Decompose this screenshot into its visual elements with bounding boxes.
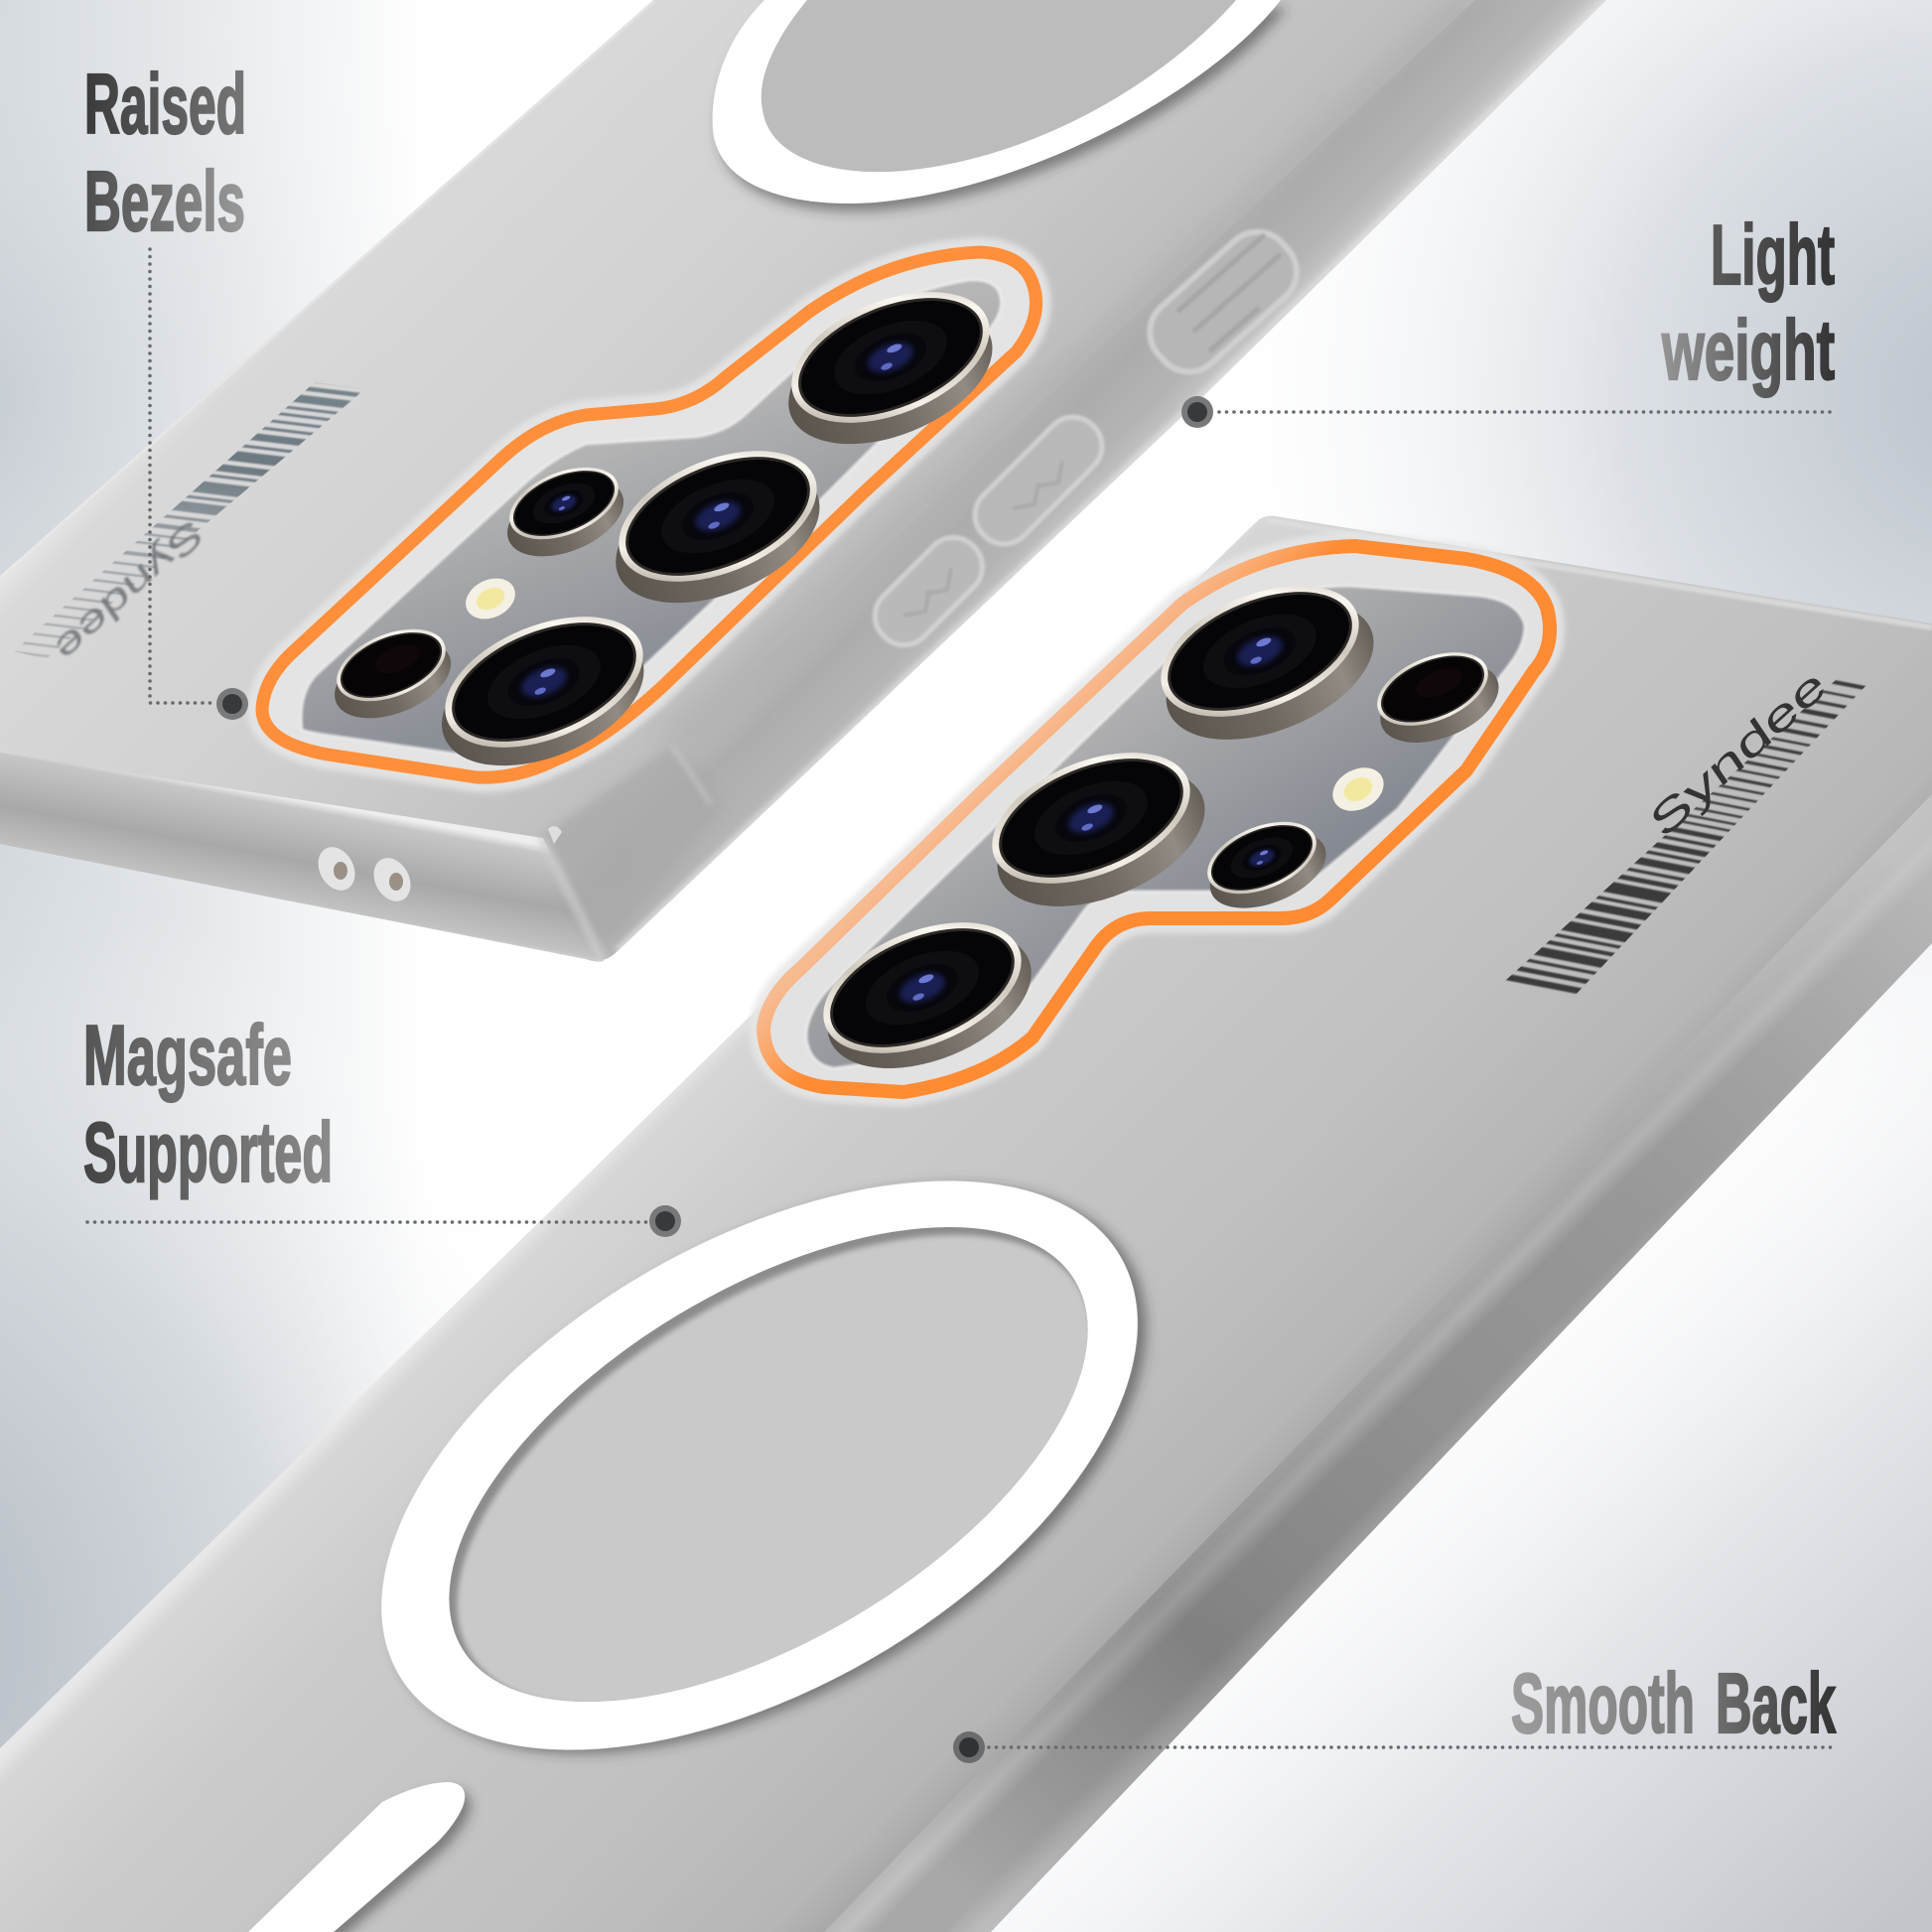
speaker holes bbox=[311, 841, 418, 907]
upper Syndee logo: Syndee bbox=[48, 510, 210, 673]
marker dot: Light weight bbox=[1181, 396, 1213, 428]
upper case back face bbox=[0, 0, 1475, 838]
leader line: Magsafe Supported bbox=[87, 1220, 650, 1224]
heading: Magsafe Supported bbox=[83, 1009, 333, 1200]
upper barcode bbox=[30, 384, 339, 655]
upper case bottom wall bbox=[0, 753, 604, 962]
upper case side wall bbox=[0, 0, 1606, 961]
marker dot: Raised Bezels bbox=[216, 688, 248, 720]
orange bezel bbox=[262, 252, 1036, 777]
lower raised rim halo bbox=[763, 546, 1550, 1092]
upper power button bbox=[1136, 218, 1311, 385]
lower MagSafe ring bbox=[381, 1177, 1155, 1761]
camera plate bbox=[301, 280, 1002, 755]
lens: lower centre bbox=[971, 724, 1225, 933]
lens: lower small bbox=[1194, 805, 1337, 923]
lower case top edge highlight bbox=[1266, 520, 1932, 627]
heading: Raised Bezels: Bezels bbox=[84, 155, 245, 249]
lower flash bbox=[1325, 759, 1391, 819]
heading: Light weight bbox=[1661, 208, 1835, 398]
heading: Magsafe Supported: Magsafe bbox=[83, 1009, 292, 1103]
upper phone case bbox=[0, 0, 1606, 962]
lower case body bbox=[0, 516, 1932, 1932]
lower camera plate bbox=[806, 586, 1525, 1068]
lens: main centre bbox=[591, 425, 843, 629]
heading: Raised Bezels: Raised bbox=[84, 58, 246, 152]
lens: wide bottom bbox=[418, 591, 668, 792]
heading: Raised Bezels bbox=[84, 58, 246, 249]
heading: Smooth Back: Back bbox=[1716, 1657, 1836, 1751]
leader line: Smooth Back bbox=[989, 1745, 1833, 1749]
marker dot: Smooth Back bbox=[953, 1731, 985, 1763]
leader line: Light weight bbox=[1219, 410, 1832, 414]
lens: telephoto top bbox=[763, 266, 1016, 471]
callout: Raised Bezels bbox=[84, 58, 248, 720]
lower ring centre disc bbox=[449, 1227, 1088, 1702]
lower orange bezel bbox=[763, 546, 1550, 1092]
heading: Magsafe Supported: Supported bbox=[83, 1106, 333, 1200]
lower Syndee logo: Syndee bbox=[1642, 659, 1834, 847]
lens: lower small dark bbox=[1364, 635, 1510, 759]
upper volume buttons bbox=[864, 405, 1114, 656]
lower alignment pill bbox=[248, 1782, 465, 1932]
callout: Light weight bbox=[1181, 208, 1835, 428]
marker dot: Magsafe Supported bbox=[649, 1205, 681, 1237]
lower barcode bbox=[1541, 683, 1851, 987]
upper camera island bbox=[262, 252, 1036, 792]
lens: small dark bbox=[320, 615, 462, 734]
lower camera island bbox=[763, 546, 1550, 1095]
callout: Magsafe Supported bbox=[83, 1009, 681, 1237]
side seam and shading bbox=[0, 0, 1606, 961]
leader line: Raised Bezels bbox=[150, 249, 216, 703]
callout: Smooth Back bbox=[953, 1657, 1836, 1763]
lower phone case bbox=[0, 516, 1932, 1932]
lower case side strip shading bbox=[824, 794, 1932, 1932]
lens: small upper bbox=[492, 453, 634, 572]
flash bbox=[459, 571, 522, 626]
raised rim halo bbox=[262, 252, 1036, 777]
heading: Smooth Back: Smooth bbox=[1511, 1657, 1695, 1751]
heading: Light weight: weight bbox=[1661, 304, 1835, 398]
lens: lower bottom-left bbox=[803, 895, 1051, 1095]
heading: Light weight: Light bbox=[1711, 208, 1835, 303]
lens: lower top bbox=[1140, 557, 1394, 766]
upper ring centre disc bbox=[761, 0, 1236, 172]
upper MagSafe ring bbox=[713, 0, 1281, 204]
